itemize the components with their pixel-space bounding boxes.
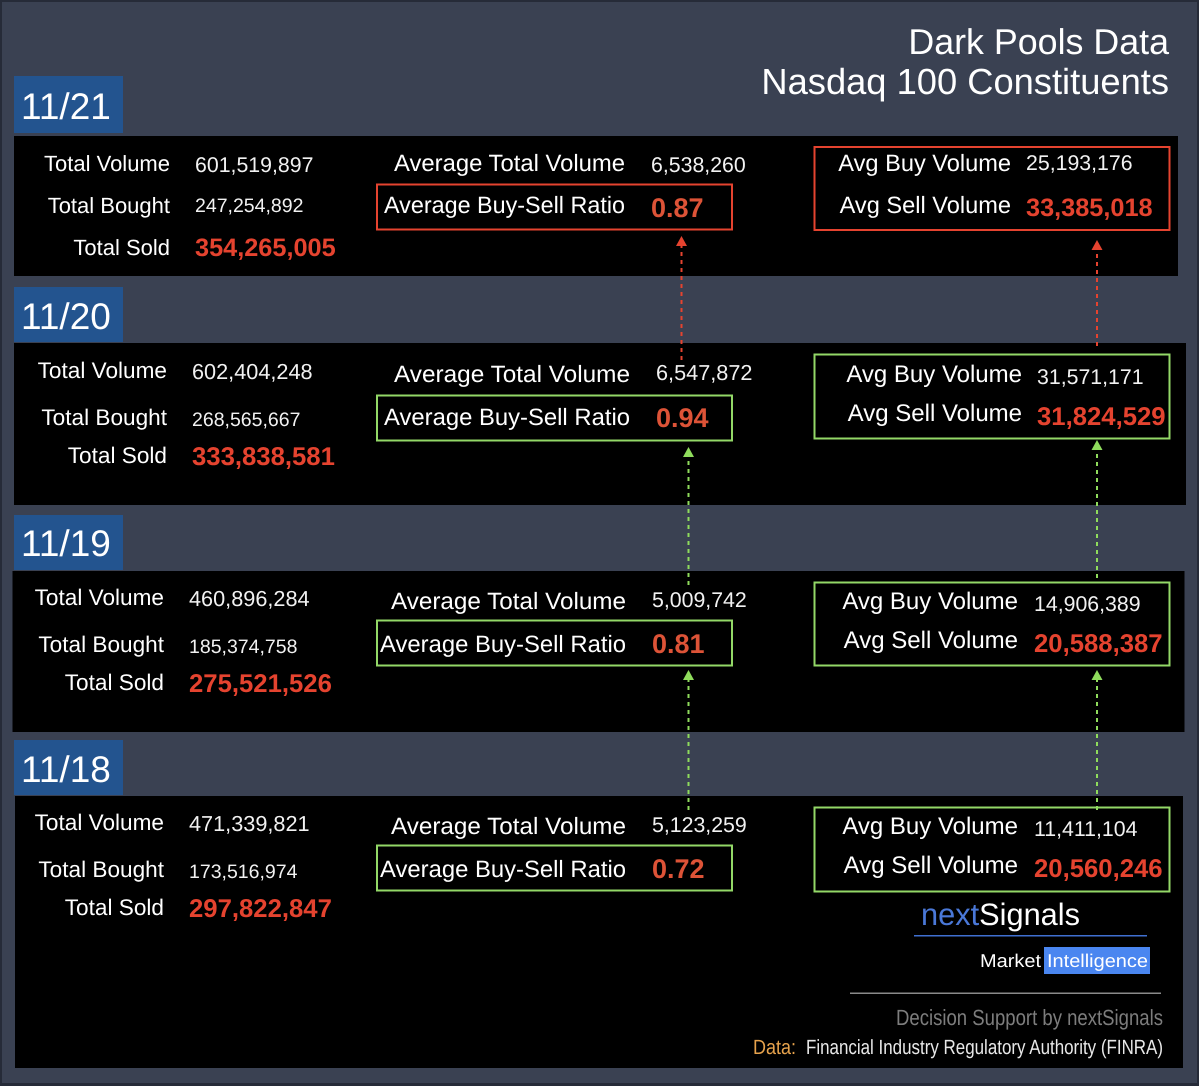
buy and sell volume 11/20: 31,571,171	[1037, 365, 1144, 389]
averages 11/19: Average Buy-Sell Ratio	[380, 632, 626, 658]
averages 11/21: Average Buy-Sell Ratio	[384, 193, 625, 219]
totals 11/21	[44, 151, 336, 262]
buy and sell volume 11/20: 31,824,529	[1037, 403, 1166, 431]
averages 11/20: Average Buy-Sell Ratio	[384, 405, 630, 431]
arrow: volume 11/18 to 11/19	[1092, 670, 1102, 810]
totals 11/18	[35, 810, 332, 923]
averages 11/18: 5,123,259	[652, 813, 747, 837]
totals 11/21: Total Bought	[48, 193, 170, 218]
totals 11/20: Total Bought	[41, 405, 168, 430]
averages 11/18: Average Buy-Sell Ratio	[380, 857, 626, 883]
buy and sell volume 11/21	[814, 147, 1170, 230]
totals 11/20: 268,565,667	[192, 409, 300, 431]
arrow: ratio 11/18 to 11/19	[683, 670, 694, 810]
buy and sell volume 11/18: Avg Sell Volume	[844, 852, 1018, 879]
panel: 11/21	[14, 76, 1178, 276]
date tag 11/18	[14, 740, 123, 795]
buy and sell volume 11/21: 33,385,018	[1026, 194, 1153, 222]
totals 11/19	[35, 585, 332, 698]
averages 11/20: Average Total Volume	[394, 362, 630, 388]
totals 11/19: 275,521,526	[189, 670, 332, 698]
totals 11/19: Total Volume	[35, 585, 164, 610]
date tag 11/21: 11/21	[21, 86, 111, 127]
buy and sell volume 11/20: Avg Sell Volume	[848, 400, 1022, 427]
averages 11/21: 0.87	[651, 193, 704, 223]
buy and sell volume 11/18: 11,411,104	[1034, 817, 1138, 841]
tagline: Market Intelligence: Market	[980, 950, 1041, 971]
averages 11/18: 0.72	[652, 854, 705, 884]
panel: 11/18	[14, 740, 1183, 1068]
arrow: ratio 11/20 to 11/21	[676, 236, 687, 360]
buy and sell volume 11/21: Avg Buy Volume	[838, 151, 1011, 177]
buy and sell volume 11/19: 20,588,387	[1034, 630, 1163, 658]
buy and sell volume 11/19	[814, 582, 1170, 666]
averages 11/21: 6,538,260	[651, 153, 746, 177]
buy and sell volume 11/18: Avg Buy Volume	[842, 813, 1018, 840]
buy and sell volume 11/19: Avg Buy Volume	[842, 588, 1018, 615]
totals 11/20	[38, 358, 335, 471]
averages 11/19	[377, 588, 747, 666]
totals 11/18: 297,822,847	[189, 895, 332, 923]
buy and sell volume 11/18: 20,560,246	[1034, 855, 1163, 883]
title	[761, 22, 1169, 102]
averages 11/18	[377, 813, 747, 890]
totals 11/20: Total Sold	[68, 443, 167, 468]
date tag 11/20: 11/20	[21, 296, 111, 337]
arrow: volume 11/20 to 11/21	[1092, 240, 1102, 346]
totals 11/21: Total Volume	[44, 151, 170, 176]
buy and sell volume 11/21: 25,193,176	[1026, 151, 1133, 175]
totals 11/18: Total Bought	[38, 857, 165, 882]
totals 11/21: 354,265,005	[195, 234, 336, 262]
arrow: volume 11/19 to 11/20	[1092, 440, 1102, 578]
title: Dark Pools Data	[908, 22, 1169, 62]
averages 11/18: Average Total Volume	[391, 814, 626, 840]
buy and sell volume 11/21: Avg Sell Volume	[840, 193, 1011, 219]
title: Nasdaq 100 Constituents	[761, 61, 1169, 102]
averages 11/20: 0.94	[656, 403, 709, 433]
panel: 11/19	[12, 515, 1184, 732]
averages 11/21	[377, 151, 746, 230]
totals 11/20: Total Volume	[38, 358, 167, 383]
averages 11/19: 5,009,742	[652, 588, 747, 612]
data source: Data:	[753, 1036, 796, 1059]
date tag 11/19: 11/19	[21, 523, 111, 564]
averages 11/20	[377, 360, 752, 440]
totals 11/18: 173,516,974	[189, 861, 298, 883]
totals 11/20: 333,838,581	[192, 443, 335, 471]
totals 11/18: Total Sold	[65, 895, 164, 920]
totals 11/21: Total Sold	[73, 235, 170, 260]
buy and sell volume 11/19: 14,906,389	[1034, 592, 1141, 616]
panel: 11/20	[14, 287, 1186, 505]
date tag 11/20	[14, 287, 123, 342]
totals 11/18: 471,339,821	[189, 811, 310, 836]
logo: nextSignals: nextSignals	[921, 897, 1080, 932]
date tag 11/19	[14, 515, 123, 570]
buy and sell volume 11/19: Avg Sell Volume	[844, 627, 1018, 654]
buy and sell volume 11/18	[814, 808, 1170, 892]
totals 11/19: Total Bought	[38, 632, 165, 657]
totals 11/21: 247,254,892	[195, 195, 303, 217]
arrow: ratio 11/19 to 11/20	[683, 447, 694, 585]
tagline: Market Intelligence	[980, 947, 1150, 974]
totals 11/18: Total Volume	[35, 810, 164, 835]
totals 11/21: 601,519,897	[195, 153, 313, 177]
averages 11/19: Average Total Volume	[391, 589, 626, 615]
date tag 11/18: 11/18	[21, 749, 111, 790]
totals 11/19: Total Sold	[65, 670, 164, 695]
date tag 11/21	[14, 76, 123, 133]
totals 11/20: 602,404,248	[192, 359, 313, 384]
averages 11/20: 6,547,872	[656, 360, 752, 385]
buy and sell volume 11/20	[814, 354, 1170, 438]
totals 11/19: 185,374,758	[189, 636, 297, 658]
averages 11/19: 0.81	[652, 629, 705, 659]
averages 11/21: Average Total Volume	[394, 151, 625, 177]
totals 11/19: 460,896,284	[189, 586, 310, 611]
tagline: Market Intelligence: Intelligence	[1047, 950, 1148, 971]
buy and sell volume 11/20: Avg Buy Volume	[846, 361, 1022, 388]
